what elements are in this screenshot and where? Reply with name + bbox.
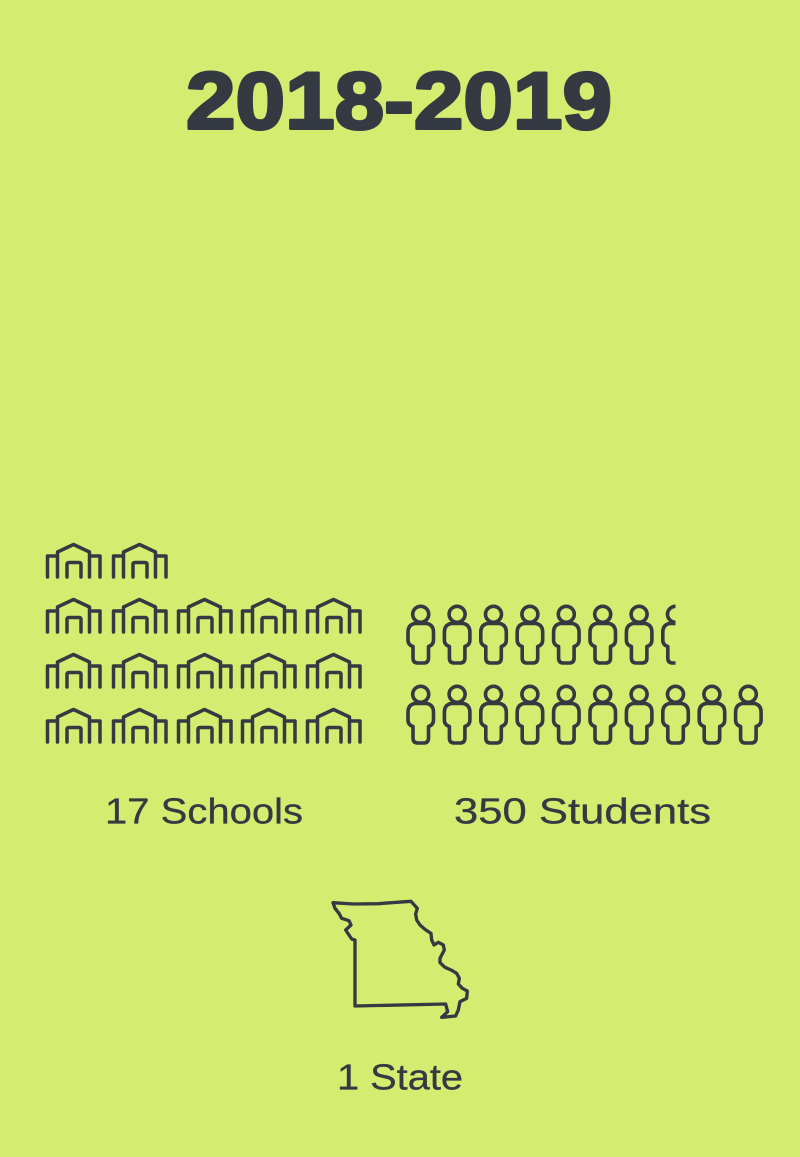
label: 350 Students: 350 Students xyxy=(454,790,711,832)
infographic canvas xyxy=(46,70,763,1090)
title: 2018-2019 xyxy=(186,56,612,146)
students pictogram: people in two rows xyxy=(408,606,761,743)
icon: Missouri state outline xyxy=(333,901,467,1017)
label: 1 State: 1 State xyxy=(337,1056,463,1098)
label: 17 Schools: 17 Schools xyxy=(105,790,303,832)
schools pictogram: 17 buildings xyxy=(48,544,360,742)
